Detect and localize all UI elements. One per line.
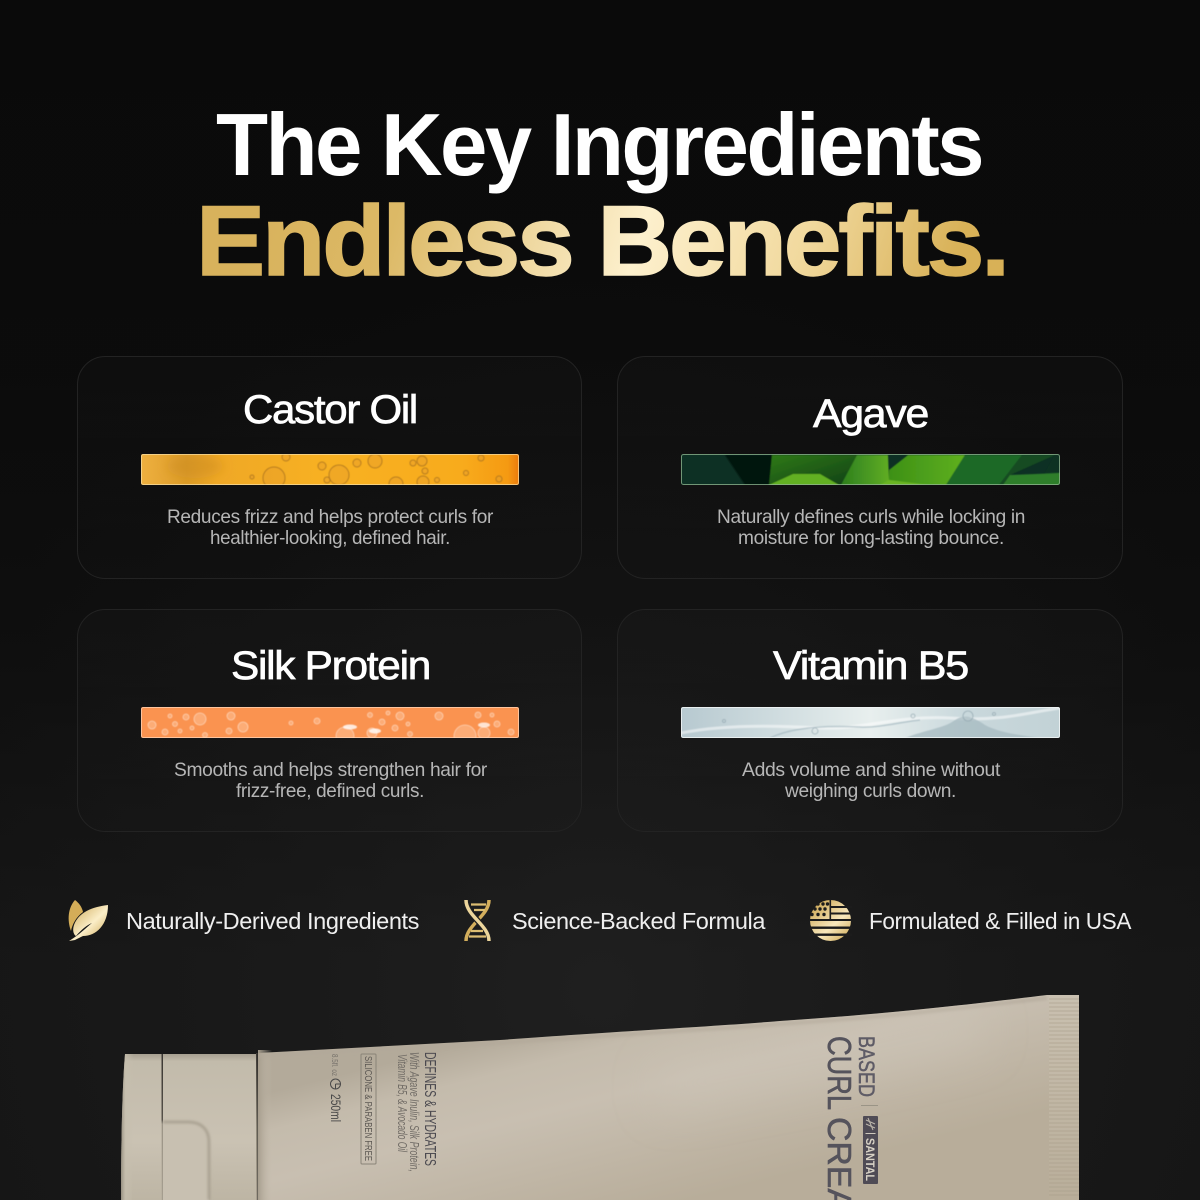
panel: Vitamin B5 bbox=[618, 610, 1122, 832]
benefit: naturally-derived ingredients bbox=[69, 900, 419, 941]
description: moisture for long-lasting bounce. bbox=[738, 527, 1004, 549]
title line: The Key Ingredients: The Key Ingredients bbox=[216, 95, 982, 194]
heading: Vitamin B5: Vitamin B5 bbox=[773, 644, 968, 688]
panel: Silk Protein bbox=[78, 610, 582, 832]
tube label: santal badge bbox=[863, 1116, 878, 1184]
label: Formulated & Filled in USA bbox=[869, 908, 1132, 934]
title bbox=[196, 95, 1007, 296]
heading: Silk Protein: Silk Protein bbox=[231, 644, 430, 688]
heading: Castor Oil: Castor Oil bbox=[243, 388, 417, 432]
tube label: product name bbox=[821, 1036, 858, 1200]
image strip: agave leaves bbox=[681, 454, 1060, 485]
description: Naturally defines curls while locking in bbox=[717, 506, 1025, 528]
heading: Agave: Agave bbox=[813, 392, 928, 436]
tube label: free-from badge: SILICONE & PARABEN FREE bbox=[362, 1056, 373, 1161]
tube body bbox=[258, 995, 1079, 1200]
tube label: brand: BASED bbox=[854, 1036, 879, 1097]
tube label: volume: 8.5fl. oz bbox=[330, 1054, 340, 1076]
description: frizz-free, defined curls. bbox=[236, 780, 424, 802]
description bbox=[717, 506, 1025, 549]
crimp seal bbox=[1049, 995, 1079, 1200]
icon: DNA helix bbox=[466, 900, 489, 941]
benefit: science-backed formula bbox=[466, 900, 766, 941]
description: Smooths and helps strengthen hair for bbox=[174, 759, 488, 781]
image strip: oil bubbles bbox=[141, 454, 519, 485]
title line: Endless Benefits.: Endless Benefits. bbox=[196, 185, 1007, 296]
benefit: formulated and filled in USA bbox=[809, 899, 1132, 941]
image strip: water bbox=[681, 707, 1060, 738]
product: curl cream tube bbox=[121, 995, 1079, 1200]
label: Science-Backed Formula bbox=[512, 908, 766, 934]
tube label: product name: CURL bbox=[821, 1036, 858, 1110]
tube cap bbox=[121, 1053, 258, 1200]
tube label: volume: 250ml bbox=[328, 1094, 343, 1122]
panel: Castor Oil bbox=[78, 356, 582, 578]
panel: Agave bbox=[618, 356, 1122, 578]
description bbox=[742, 759, 1001, 802]
label: Naturally-Derived Ingredients bbox=[126, 908, 419, 934]
tube label: volume bbox=[328, 1054, 343, 1122]
image strip: silk bubbles bbox=[141, 707, 519, 738]
icon: flag globe bbox=[809, 899, 852, 941]
tube label: santal badge: SANTAL bbox=[863, 1138, 877, 1181]
description bbox=[167, 506, 494, 549]
description bbox=[174, 759, 488, 802]
tube label: free-from badge bbox=[361, 1054, 376, 1164]
tube label: separator bbox=[861, 1105, 878, 1106]
icon: leaf bbox=[69, 900, 108, 941]
description: healthier-looking, defined hair. bbox=[210, 527, 450, 549]
description: Adds volume and shine without bbox=[742, 759, 1001, 781]
description: weighing curls down. bbox=[784, 780, 956, 802]
description: Reduces frizz and helps protect curls for bbox=[167, 506, 494, 528]
